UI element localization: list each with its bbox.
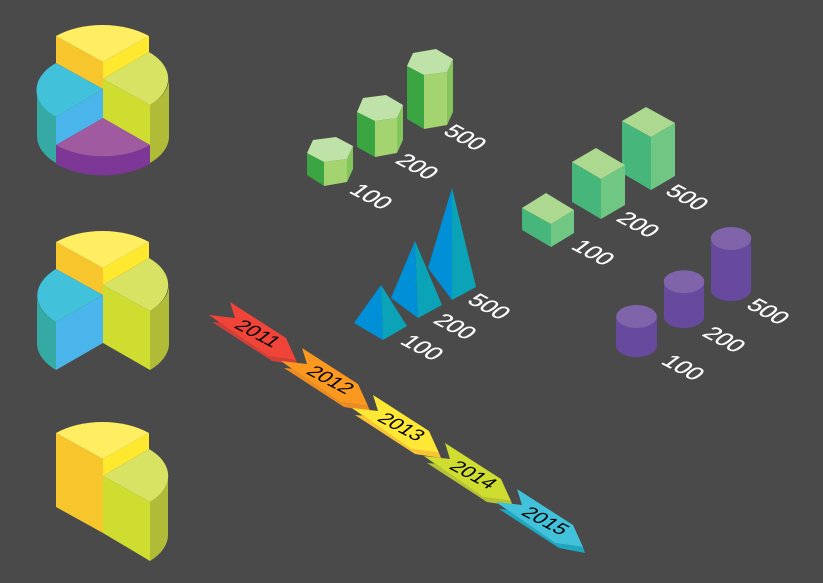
timeline ribbon: 2012: [281, 348, 370, 411]
slice: yellow: [56, 422, 149, 533]
pie chart: five slices: [36, 25, 169, 175]
label 500: 500: [462, 289, 517, 323]
timeline ribbon: 2011: 2011: [229, 317, 285, 351]
pie chart: three slices: [37, 231, 169, 370]
pie chart: two slices: [56, 422, 168, 561]
timeline ribbon: 2014: [424, 443, 513, 506]
cuboid bar chart: [522, 107, 715, 269]
cuboid 100: [522, 193, 574, 247]
label 200: 200: [390, 149, 445, 183]
slice: yellow: [56, 231, 149, 295]
pyramid 100: [354, 285, 407, 340]
slice: lime: [103, 52, 169, 163]
slice: yellow: [56, 25, 149, 89]
slice: blue: [36, 63, 103, 163]
timeline ribbon: 2014: 2014: [444, 458, 502, 493]
label 100: 100: [344, 179, 399, 213]
label 200: 200: [428, 309, 483, 343]
label 500: 500: [660, 180, 715, 214]
timeline ribbon: 2015: 2015: [516, 504, 574, 539]
pyramid 200: [391, 241, 442, 318]
cylinder 500: [711, 227, 751, 301]
cylinder bar chart: [616, 227, 796, 384]
slice: blue: [37, 269, 103, 370]
slice: lime: [103, 449, 168, 561]
pyramid 500: [428, 188, 476, 300]
hex bar 200: [357, 95, 403, 157]
pyramid bar chart: [354, 188, 517, 364]
timeline ribbon: 2013: 2013: [372, 410, 430, 445]
slice: lime: [103, 258, 169, 370]
label 500: 500: [741, 294, 796, 328]
slice: purple: [56, 118, 150, 175]
label 500: 500: [438, 120, 493, 154]
label 100: 100: [656, 350, 711, 384]
timeline ribbon: 2013: [352, 395, 441, 458]
timeline ribbon: 2012: 2012: [301, 363, 359, 398]
timeline ribbon: 2011: [209, 302, 298, 365]
cuboid 200: [572, 148, 625, 219]
label 100: 100: [566, 235, 621, 269]
cuboid 500: [622, 107, 675, 190]
cylinder 200: [664, 270, 704, 328]
timeline ribbon: 2015: [496, 489, 585, 553]
label 200: 200: [697, 322, 752, 356]
label 200: 200: [611, 207, 666, 241]
hex bar 500: [407, 49, 453, 129]
hexagonal prism bar chart: [307, 49, 493, 213]
label 100: 100: [395, 330, 450, 364]
cylinder 100: [616, 305, 657, 357]
hex bar 100: [307, 137, 353, 186]
